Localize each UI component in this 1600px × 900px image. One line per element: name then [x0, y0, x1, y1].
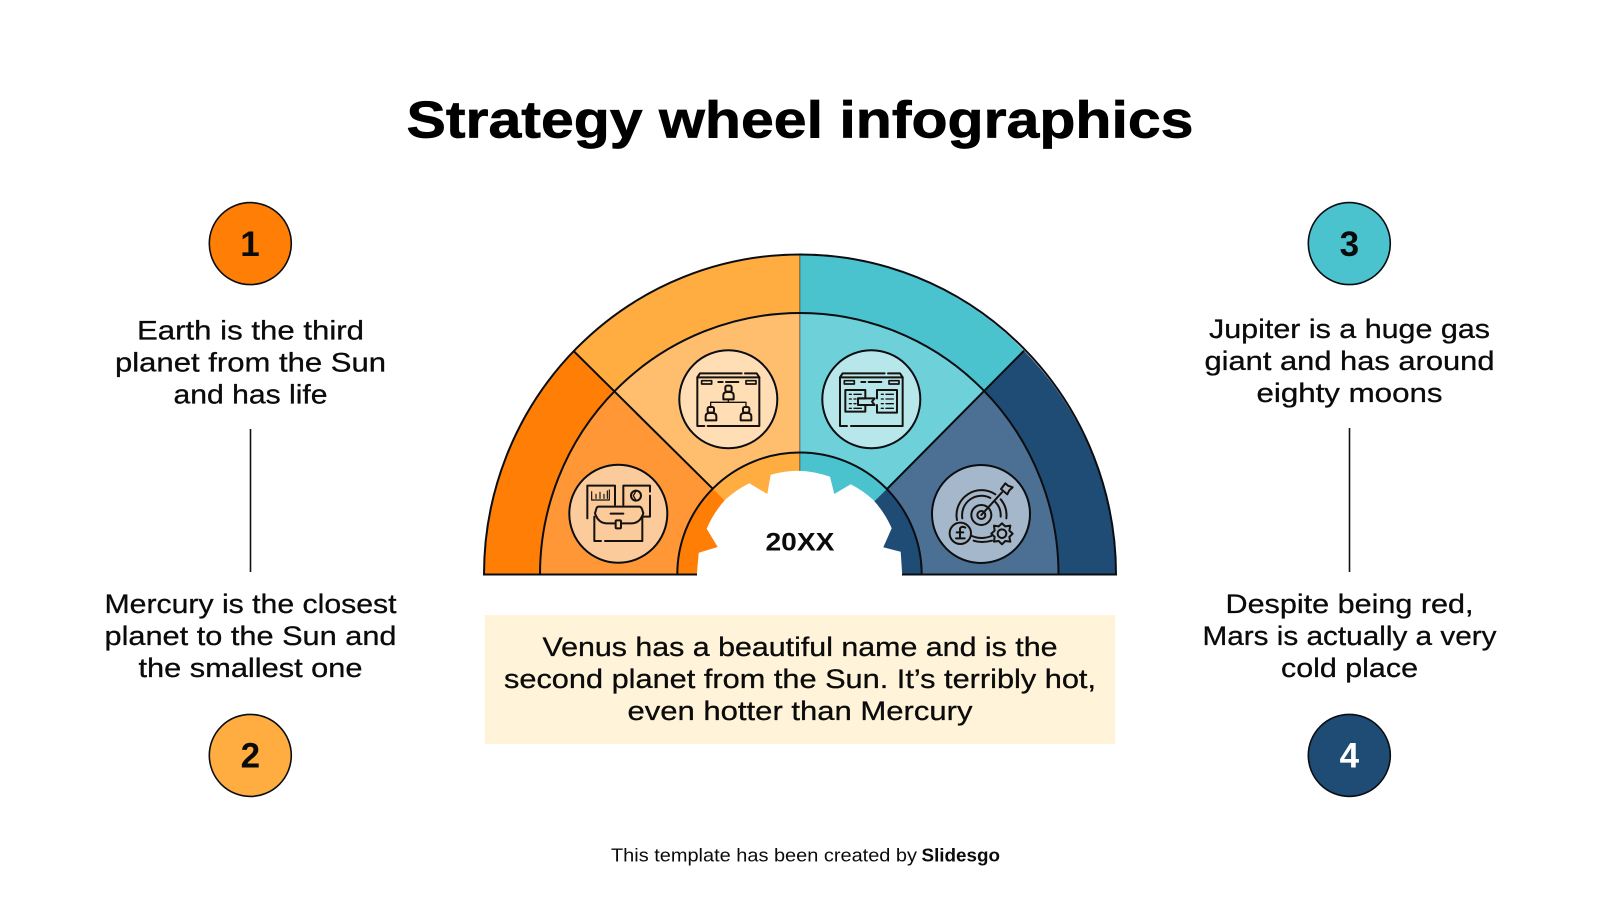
badge 1: 1 [240, 225, 260, 264]
icon: target with coin and gear [932, 465, 1030, 563]
inner ring segments [677, 452, 922, 574]
badge 4 [1308, 714, 1390, 796]
connector line right [1348, 428, 1350, 572]
text block: Mercury: Mercury is the closest [104, 589, 397, 619]
text block: Earth: planet from the Sun [115, 348, 386, 378]
badge 3 [1308, 203, 1390, 285]
callout: Venus: even hotter than Mercury [628, 696, 973, 726]
text block: Mercury: planet to the Sun and [104, 621, 396, 651]
icon: briefcase with reports [569, 465, 667, 563]
footer credit: Slidesgo [922, 846, 1000, 866]
text block: Mars: Despite being red, [1226, 589, 1474, 619]
badge 4: 4 [1340, 736, 1360, 776]
text block: Jupiter [1204, 314, 1494, 408]
title: Strategy wheel infographics [406, 92, 1194, 150]
callout: Venus: Venus has a beautiful name and is the [542, 632, 1058, 662]
strategy wheel [484, 254, 1116, 576]
badge 3: 3 [1340, 225, 1359, 264]
text block: Jupiter: Jupiter is a huge gas [1209, 314, 1490, 344]
text block: Jupiter: giant and has around [1204, 346, 1494, 376]
text block: Mercury: the smallest one [138, 653, 362, 683]
footer credit: This template has been created by [611, 846, 917, 866]
text block: Earth: Earth is the third [137, 316, 364, 346]
text block: Earth [115, 316, 386, 410]
text block: Earth: and has life [174, 380, 328, 410]
outer ring segments [484, 254, 1116, 574]
text block: Mars [1202, 589, 1497, 683]
middle ring segments [540, 313, 1058, 574]
central gear [697, 471, 902, 576]
center label: 20XX [766, 528, 835, 556]
wheel outlines [484, 254, 1116, 574]
text block: Mars: Mars is actually a very [1202, 621, 1497, 651]
callout: Venus: second planet from the Sun. It’s terribly hot, [504, 664, 1096, 694]
text block: Jupiter: eighty moons [1256, 378, 1442, 408]
badge 2 [209, 714, 291, 796]
callout: Venus [485, 615, 1115, 744]
badge 1 [209, 203, 291, 285]
icon: organisation chart window [679, 350, 777, 448]
connector line left [250, 429, 252, 572]
text block: Mercury [104, 589, 397, 683]
icon: process flow window [822, 350, 920, 448]
text block: Mars: cold place [1281, 653, 1418, 683]
badge 2: 2 [241, 736, 260, 776]
